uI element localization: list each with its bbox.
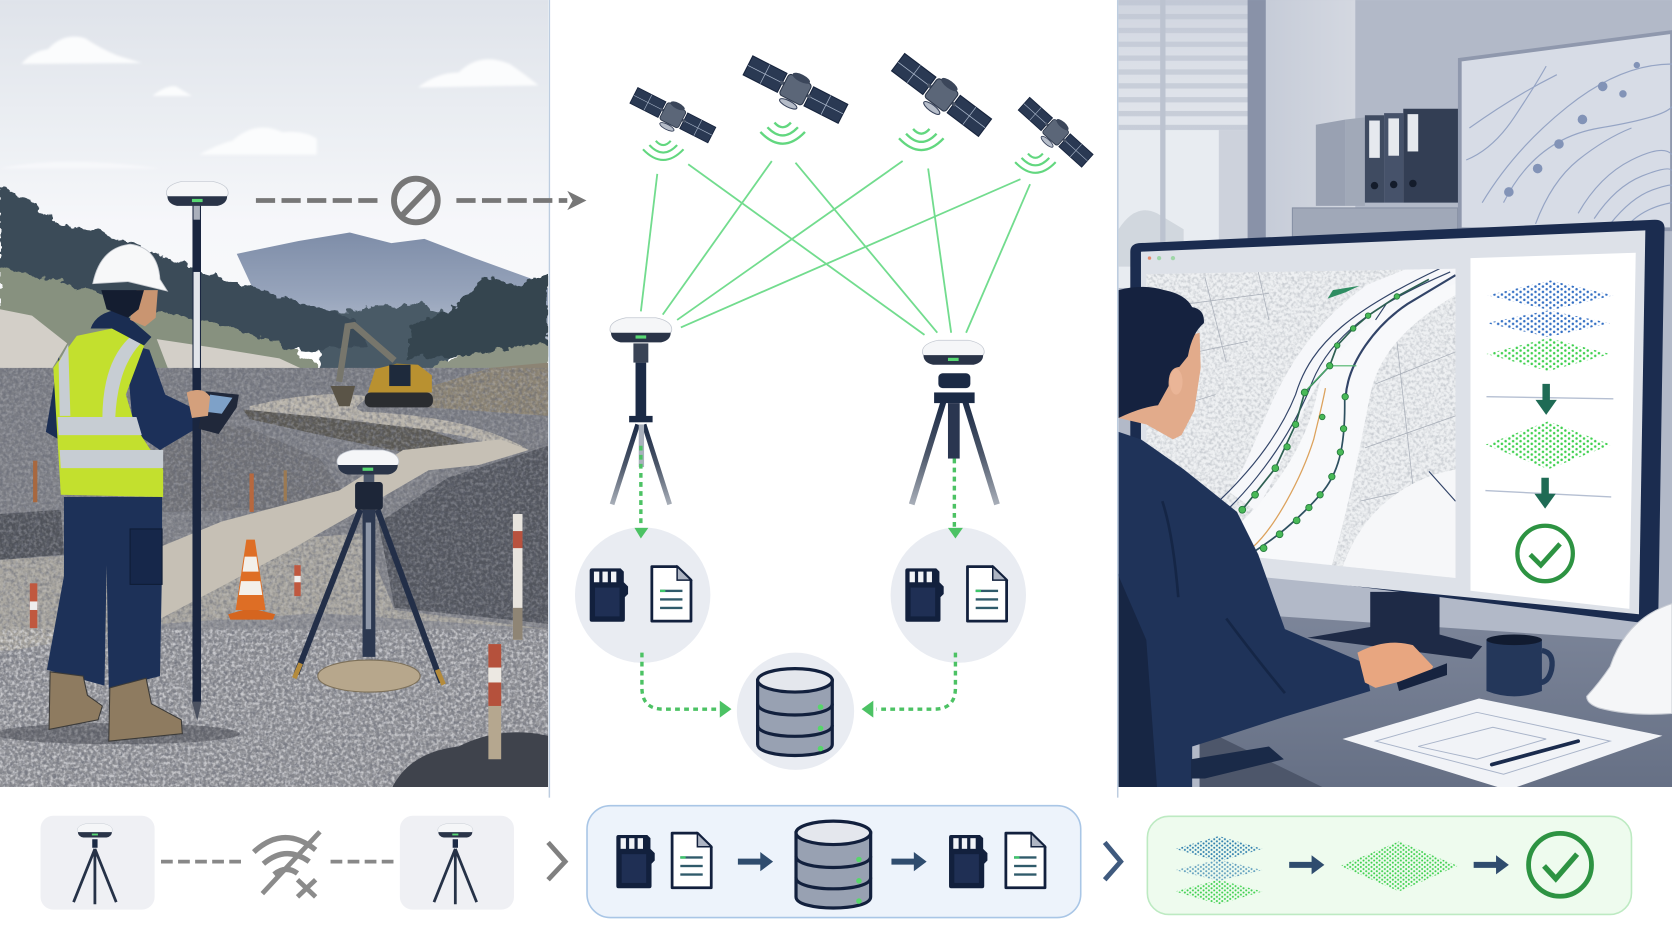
far mountains — [237, 232, 548, 341]
desk — [1200, 616, 1672, 787]
column — [1248, 0, 1266, 256]
satellite 4 — [1014, 94, 1096, 173]
wall map — [1460, 32, 1672, 229]
monitor stand — [1307, 592, 1482, 659]
database circle — [737, 653, 854, 770]
dotted arrows — [641, 446, 955, 709]
shadow — [0, 723, 240, 744]
collar — [91, 309, 151, 346]
pale cut slopes — [0, 309, 300, 368]
hair — [1119, 287, 1204, 418]
dark spoil right — [379, 446, 548, 624]
road corridor — [1205, 256, 1477, 597]
data circle left — [575, 527, 710, 663]
blueprint paper — [1343, 698, 1662, 790]
merged point cloud — [1340, 841, 1458, 891]
hair — [101, 290, 144, 318]
window blinds — [1119, 0, 1249, 130]
hand — [1357, 643, 1433, 688]
right dirt slope — [427, 363, 548, 416]
divider 2 — [1485, 491, 1611, 497]
cabinet — [1292, 208, 1458, 240]
berm — [243, 410, 464, 452]
satellite 1 — [627, 83, 718, 160]
right arm — [129, 348, 192, 450]
sleeve fold — [1162, 501, 1285, 693]
SD card left — [590, 568, 628, 622]
panel: office data processing — [1119, 0, 1672, 790]
mid pile — [160, 424, 343, 512]
signal lines — [641, 161, 1030, 335]
armrest — [1191, 746, 1284, 778]
panel: GNSS data collection — [575, 49, 1096, 770]
binders — [1316, 109, 1460, 206]
lower road fan — [1338, 469, 1456, 581]
chair — [1119, 574, 1181, 787]
bottom workflow strip — [41, 806, 1631, 918]
database — [758, 669, 832, 756]
excavator — [331, 325, 433, 407]
stakes — [30, 461, 522, 759]
right hill — [426, 342, 548, 400]
wall — [1119, 0, 1672, 787]
mouse pad — [1397, 663, 1447, 691]
body and arm — [1119, 432, 1370, 787]
satellite 3 — [886, 49, 995, 150]
tile right — [400, 816, 514, 910]
helmet — [93, 244, 167, 291]
document right — [967, 567, 1007, 621]
document left — [652, 567, 691, 621]
document — [1006, 833, 1045, 888]
arrowheads — [634, 528, 963, 718]
arrow — [1289, 855, 1324, 874]
gravel texture — [0, 368, 548, 787]
arrow down 1 — [1536, 384, 1557, 415]
window — [1119, 0, 1249, 288]
arrow — [738, 852, 773, 871]
chevron 1 — [548, 842, 565, 880]
panel: field survey scene — [0, 0, 548, 787]
chevron 2 — [1105, 842, 1121, 880]
vest — [53, 328, 163, 497]
blind shade — [1119, 0, 1249, 130]
SD card — [616, 835, 655, 888]
divider lines — [549, 0, 1118, 798]
map grid — [1146, 272, 1456, 533]
step 1: base stations without link — [41, 816, 514, 910]
vest stripes — [58, 337, 163, 468]
foreground gravel — [0, 614, 548, 708]
forest right — [411, 272, 548, 357]
window trees — [1119, 210, 1184, 267]
tripod icon right — [434, 824, 477, 904]
screen title bar dots — [1148, 256, 1175, 260]
dark stones — [392, 732, 548, 787]
desk front — [1200, 727, 1322, 787]
pale dirt — [0, 533, 548, 650]
green hillside — [0, 268, 318, 368]
forest left — [0, 187, 368, 352]
tile left — [41, 816, 155, 910]
tripod base station — [294, 450, 444, 692]
left arm — [46, 357, 60, 439]
monitor screen — [1141, 230, 1645, 614]
SD card — [949, 835, 987, 888]
arrow — [1474, 855, 1509, 874]
trousers — [47, 497, 162, 689]
pen — [1492, 741, 1578, 765]
light wall — [1266, 0, 1355, 277]
tripod icon left — [74, 824, 116, 904]
blocked signal dashed arrow — [256, 179, 586, 222]
divider 1 — [1486, 397, 1613, 399]
mid-ground highlights — [0, 368, 548, 629]
wall beside window — [1219, 128, 1249, 288]
boots — [49, 672, 182, 741]
step 3 box — [1147, 816, 1631, 914]
mug — [1486, 635, 1552, 696]
dashed links — [161, 860, 397, 863]
cargo pocket — [130, 529, 162, 584]
main road — [157, 439, 529, 621]
satellite 2 — [739, 51, 850, 144]
traffic cone — [228, 540, 275, 620]
merged point layers — [1486, 280, 1613, 371]
forest valley — [320, 304, 448, 373]
dark spoil left — [0, 510, 64, 560]
face and neck — [1119, 333, 1201, 439]
monitor bezel — [1130, 220, 1665, 625]
arrow down 2 — [1534, 478, 1556, 509]
ground — [0, 368, 548, 653]
data circle right — [891, 527, 1026, 663]
surveyor — [46, 181, 239, 741]
icon: crossed wifi — [254, 832, 320, 897]
left rover on tripod — [610, 318, 672, 504]
adjusted point cloud — [1485, 421, 1611, 469]
right base station on tripod — [912, 340, 997, 504]
sky — [0, 0, 548, 270]
SD card right — [905, 568, 944, 622]
icon: check circle — [1529, 833, 1591, 896]
pole — [192, 205, 201, 704]
document — [672, 833, 711, 888]
arrow — [891, 852, 927, 871]
engineer — [1119, 287, 1433, 787]
hand — [187, 390, 210, 418]
database — [796, 821, 871, 908]
hard hat — [1587, 604, 1672, 714]
results panel — [1470, 253, 1636, 609]
step 2 box — [587, 806, 1081, 918]
upper road — [250, 394, 529, 450]
window mullion — [1160, 0, 1165, 256]
tablet — [198, 391, 239, 434]
ear — [1170, 369, 1183, 395]
clouds — [22, 36, 536, 154]
foreground highlights — [0, 629, 548, 787]
face — [130, 290, 158, 326]
map view — [1146, 256, 1477, 597]
point cloud layers — [1175, 836, 1263, 904]
check circle — [1517, 526, 1573, 581]
